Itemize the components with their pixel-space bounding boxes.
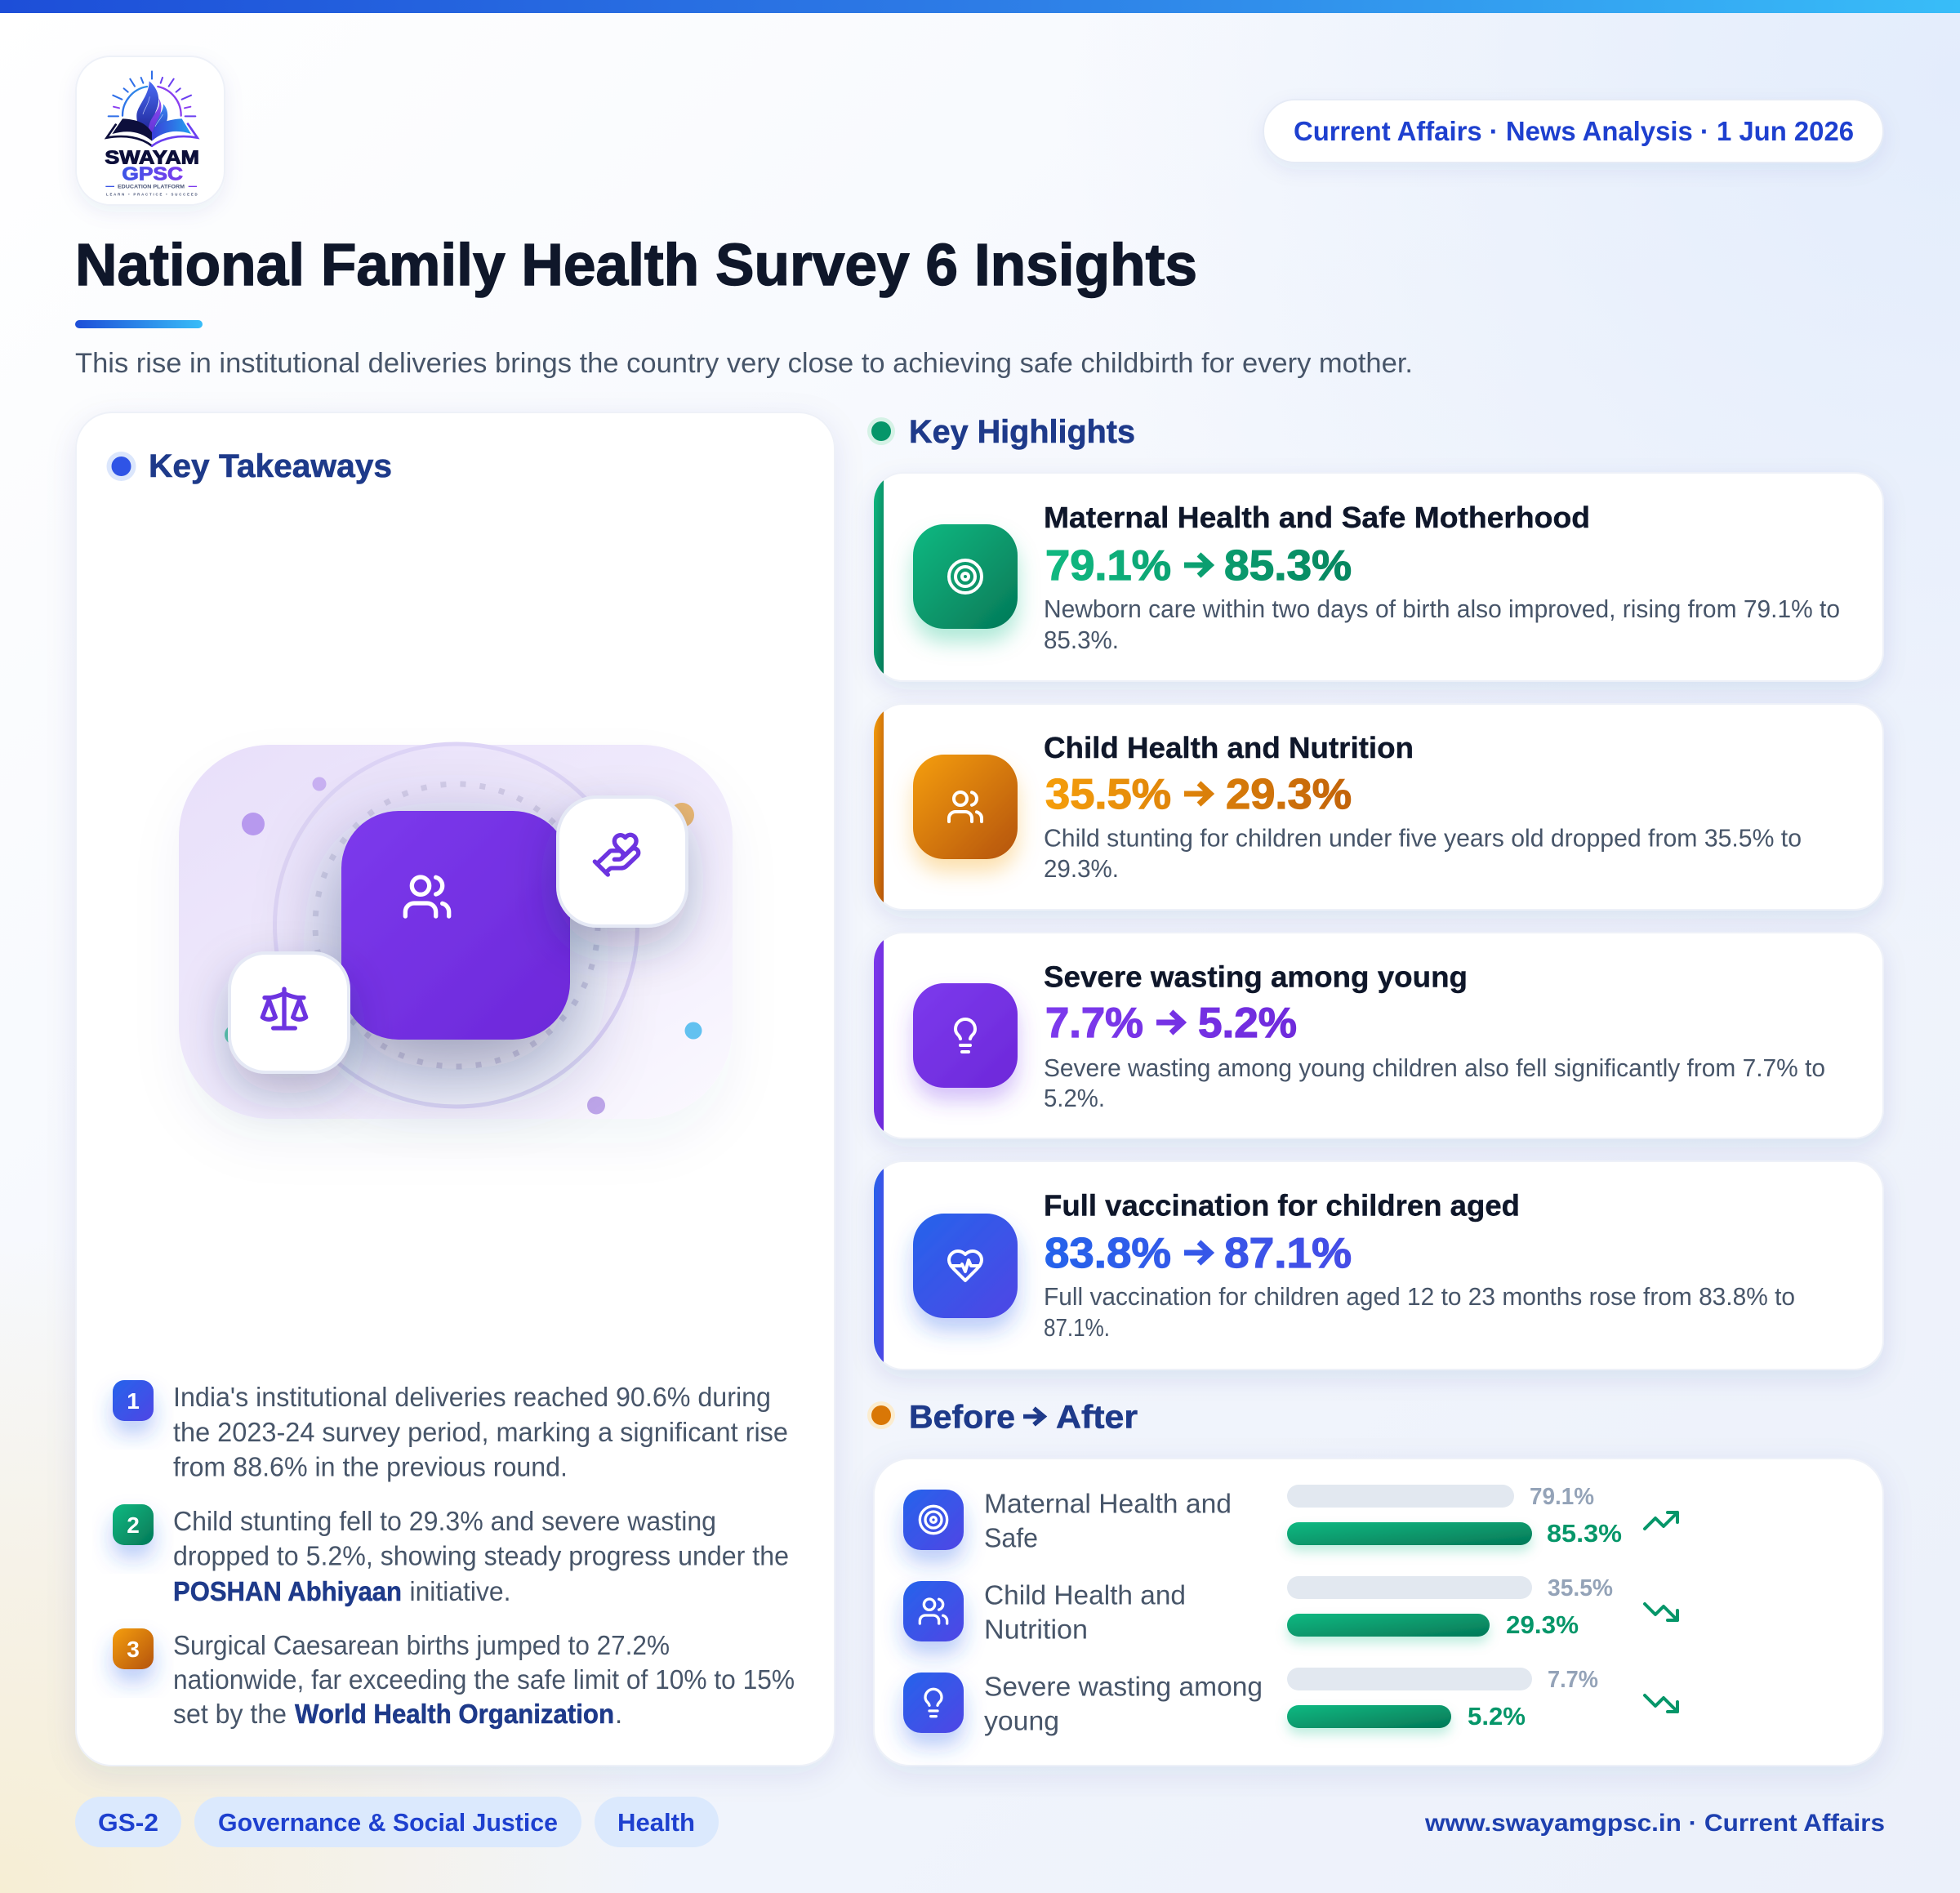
card: full vaccination: Full vaccination for children aged 12 to 23 months rose from 83.8% to bbox=[1044, 1283, 1795, 1311]
logo card bbox=[76, 56, 225, 205]
date pill: Current Affairs · News Analysis · 1 Jun 2026 bbox=[1294, 116, 1854, 146]
row: severe wasting: Severe wasting among bbox=[984, 1673, 1263, 1702]
icon tile: target bbox=[913, 524, 1018, 629]
logo: wordmark bbox=[105, 147, 199, 196]
card: severe wasting: Severe wasting among young bbox=[1044, 960, 1468, 993]
illustration backdrop bbox=[179, 745, 733, 1119]
icon: trending down bbox=[1645, 1695, 1677, 1712]
takeaway 2: Child stunting fell to 29.3% and severe wasting bbox=[173, 1506, 716, 1536]
card: maternal health: 85.3%. bbox=[1044, 626, 1119, 654]
card: child health: Child stunting for children under five years old dropped from 35.5% to bbox=[1044, 825, 1802, 853]
title underline bbox=[75, 320, 203, 328]
row: child health bbox=[903, 1575, 1677, 1645]
tag: health: Health bbox=[617, 1808, 695, 1837]
stat: 83.8% to 87.1%: 87.1% bbox=[1224, 1230, 1352, 1277]
tag: governance and social justice: Governance & Social Justice bbox=[218, 1808, 558, 1837]
subtitle: This rise in institutional deliveries brings the country very close to achieving safe childbirth for every mother. bbox=[75, 348, 1413, 379]
row: maternal health bbox=[903, 1484, 1677, 1553]
heading: key takeaways: Key Takeaways bbox=[149, 448, 392, 484]
icon: trending up bbox=[1645, 1512, 1677, 1529]
tag: GS-2: GS-2 bbox=[98, 1808, 158, 1837]
illustration: hand heart tile bbox=[558, 797, 687, 926]
card: severe wasting: 5.2%. bbox=[1044, 1085, 1105, 1112]
heading: before and after: Before bbox=[909, 1400, 1015, 1436]
icon: trending down bbox=[1645, 1604, 1677, 1620]
takeaway 3: set by the bbox=[173, 1699, 287, 1729]
row: child health: 29.3% bbox=[1506, 1610, 1579, 1639]
takeaway 2 bbox=[113, 1504, 789, 1606]
icon: users bbox=[405, 877, 449, 916]
row: child health: 35.5% bbox=[1548, 1575, 1613, 1601]
takeaway 2: 2 bbox=[127, 1512, 140, 1538]
illustration: central purple tile bbox=[341, 811, 570, 1040]
card: full vaccination: Full vaccination for children aged bbox=[1044, 1189, 1520, 1222]
stat: 7.7% to 5.2%: 5.2% bbox=[1198, 1000, 1297, 1047]
takeaway 1: the 2023-24 survey period, marking a significant rise bbox=[173, 1417, 788, 1447]
logo: wordmark: LEARN • PRACTICE • SUCCEED bbox=[106, 192, 198, 196]
stat: 79.1% to 85.3%: 79.1% bbox=[1045, 542, 1171, 590]
takeaway 1: from 88.6% in the previous round. bbox=[173, 1452, 568, 1481]
icon: hand with heart bbox=[595, 835, 639, 875]
illustration: orbit rings bbox=[274, 744, 637, 1107]
logo: open book bbox=[107, 118, 198, 146]
tag: GS-2 bbox=[75, 1797, 181, 1847]
row: child health: Child Health and bbox=[984, 1581, 1186, 1610]
heading: before and after: After bbox=[1056, 1400, 1138, 1436]
card: full vaccination: 87.1%. bbox=[1044, 1314, 1110, 1342]
icon tile: heart pulse bbox=[913, 1214, 1018, 1318]
date pill bbox=[1263, 100, 1883, 163]
takeaway 3: nationwide, far exceeding the safe limit of 10% to 15% bbox=[173, 1664, 795, 1695]
takeaway 3: World Health Organization bbox=[295, 1699, 614, 1729]
logo: rays and arc bbox=[109, 71, 195, 116]
takeaway 2: dropped to 5.2%, showing steady progress under the bbox=[173, 1540, 789, 1571]
icon tile: users bbox=[913, 755, 1018, 859]
stat: 79.1% to 85.3%: 85.3% bbox=[1224, 542, 1352, 590]
card: child health: 29.3%. bbox=[1044, 855, 1119, 883]
row: child health: Nutrition bbox=[984, 1615, 1088, 1645]
row: maternal health: Safe bbox=[984, 1524, 1038, 1553]
heading: before and after bbox=[867, 1400, 1138, 1436]
tag: health bbox=[595, 1797, 719, 1847]
takeaway 3: 3 bbox=[127, 1637, 140, 1662]
title: National Family Health Survey 6 Insights bbox=[75, 233, 1197, 298]
stat: 35.5% to 29.3%: 29.3% bbox=[1226, 771, 1352, 818]
stat: 35.5% to 29.3% bbox=[1045, 771, 1352, 818]
row: severe wasting bbox=[903, 1667, 1677, 1736]
card: child health: Child Health and Nutrition bbox=[1044, 731, 1414, 764]
logo: wordmark: GPSC bbox=[122, 163, 183, 185]
illustration: people, scales and care bbox=[179, 744, 733, 1119]
takeaway 3: . bbox=[615, 1699, 622, 1729]
card: maternal health bbox=[874, 473, 1883, 681]
panel: key takeaways bbox=[76, 412, 835, 1766]
card: maternal health: Maternal Health and Safe Motherhood bbox=[1044, 501, 1590, 534]
row: maternal health: 79.1% bbox=[1530, 1484, 1594, 1510]
stat: 7.7% to 5.2%: 7.7% bbox=[1045, 1000, 1143, 1047]
takeaway 2: initiative. bbox=[410, 1576, 511, 1606]
logo: flame bbox=[136, 81, 167, 140]
heading: key highlights: Key Highlights bbox=[909, 414, 1135, 450]
icon tile: lightbulb bbox=[913, 983, 1018, 1088]
row: maternal health: Maternal Health and bbox=[984, 1490, 1232, 1519]
row: severe wasting: young bbox=[984, 1707, 1059, 1736]
footer source: www.swayamgpsc.in · Current Affairs bbox=[1424, 1810, 1885, 1837]
card: severe wasting: Severe wasting among young children also fell significantly from 7.7% to bbox=[1044, 1054, 1825, 1082]
stat: 83.8% to 87.1%: 83.8% bbox=[1045, 1230, 1171, 1277]
row: severe wasting: 7.7% bbox=[1548, 1667, 1598, 1693]
takeaway 1: 1 bbox=[127, 1388, 140, 1414]
illustration: scales tile bbox=[229, 953, 349, 1072]
icon: balance scales bbox=[262, 989, 306, 1028]
logo: wordmark: EDUCATION PLATFORM bbox=[118, 185, 185, 190]
takeaway 1: India's institutional deliveries reached 90.6% during bbox=[173, 1382, 771, 1412]
top gradient bar bbox=[0, 0, 1960, 13]
row: severe wasting: 5.2% bbox=[1468, 1702, 1526, 1730]
card: full vaccination bbox=[874, 1161, 1883, 1370]
stat: 35.5% to 29.3%: 35.5% bbox=[1045, 771, 1171, 818]
stat: 83.8% to 87.1% bbox=[1045, 1230, 1352, 1277]
illustration: floating dots bbox=[225, 777, 702, 1114]
stat: 79.1% to 85.3% bbox=[1045, 542, 1352, 590]
card: maternal health: Newborn care within two days of birth also improved, rising from 79.1% to bbox=[1044, 595, 1840, 623]
row: maternal health: 85.3% bbox=[1547, 1519, 1622, 1548]
takeaway 3: Surgical Caesarean births jumped to 27.2% bbox=[173, 1630, 670, 1660]
takeaway 1 bbox=[113, 1380, 788, 1481]
tag: governance and social justice bbox=[194, 1797, 581, 1847]
logo: wordmark: SWAYAM bbox=[105, 147, 199, 168]
takeaway 2: POSHAN Abhiyaan bbox=[173, 1576, 402, 1606]
stat: 7.7% to 5.2% bbox=[1045, 1000, 1297, 1047]
card: child health bbox=[874, 704, 1883, 910]
card: severe wasting bbox=[874, 933, 1883, 1138]
takeaway 3 bbox=[113, 1628, 795, 1729]
panel: before and after comparison bbox=[874, 1459, 1883, 1766]
